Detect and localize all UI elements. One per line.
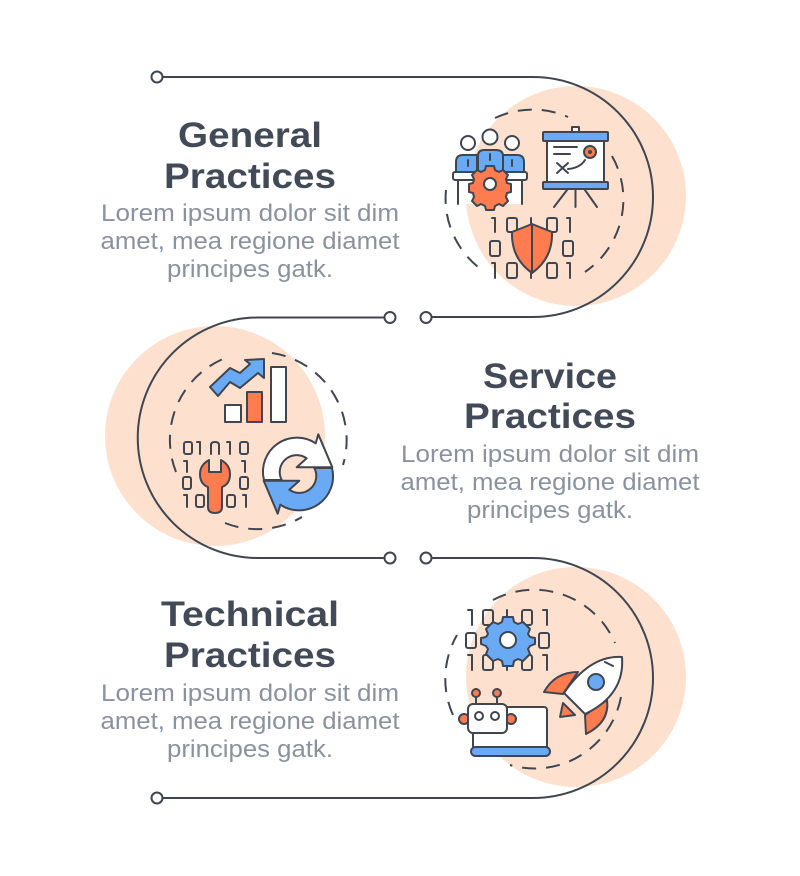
dashed ring: technical xyxy=(445,590,621,768)
icon: shield with binary xyxy=(490,218,573,278)
peach circle: technical xyxy=(466,567,686,787)
heading: General Practices xyxy=(164,116,336,196)
connector line: middle xyxy=(138,312,396,564)
text block: service: principes gatk. xyxy=(467,497,633,524)
text block: service xyxy=(400,441,700,524)
text block: technical: Lorem ipsum dolor sit dim xyxy=(101,680,399,707)
heading: General Practices: General xyxy=(178,116,322,155)
text block: general: Lorem ipsum dolor sit dim xyxy=(101,200,399,227)
heading: Technical Practices xyxy=(161,595,339,675)
text block: technical: amet, mea regione diamet xyxy=(100,708,400,735)
text block: service: amet, mea regione diamet xyxy=(400,469,700,496)
peach circle: service xyxy=(105,326,325,546)
icon: rocket xyxy=(544,657,622,734)
heading: General Practices: Practices xyxy=(164,157,336,196)
heading: Technical Practices: Practices xyxy=(164,636,336,675)
heading: Technical Practices: Technical xyxy=(161,595,339,634)
icon: wrench with binary xyxy=(183,442,248,513)
icon: team with gear xyxy=(453,130,527,210)
peach circle: general xyxy=(466,86,686,306)
heading: Service Practices: Service xyxy=(483,357,617,396)
dashed ring: general xyxy=(446,110,623,272)
connector line: top xyxy=(152,72,653,323)
text block: general xyxy=(100,200,400,283)
heading: Service Practices xyxy=(464,357,636,436)
connector line: bottom xyxy=(152,552,653,804)
icon: gear with binary xyxy=(466,610,549,670)
text block: general: amet, mea regione diamet xyxy=(100,228,400,255)
text block: technical: principes gatk. xyxy=(167,736,333,763)
text block: service: Lorem ipsum dolor sit dim xyxy=(401,441,699,468)
icon: presentation board xyxy=(543,127,608,207)
heading: Service Practices: Practices xyxy=(464,397,636,436)
dashed ring: service xyxy=(170,353,347,529)
icon: refresh arrows xyxy=(263,434,333,514)
text block: technical xyxy=(100,680,400,763)
icon: growth bars and arrow xyxy=(210,359,286,422)
text block: general: principes gatk. xyxy=(167,256,333,283)
icon: robot on laptop xyxy=(459,689,550,756)
